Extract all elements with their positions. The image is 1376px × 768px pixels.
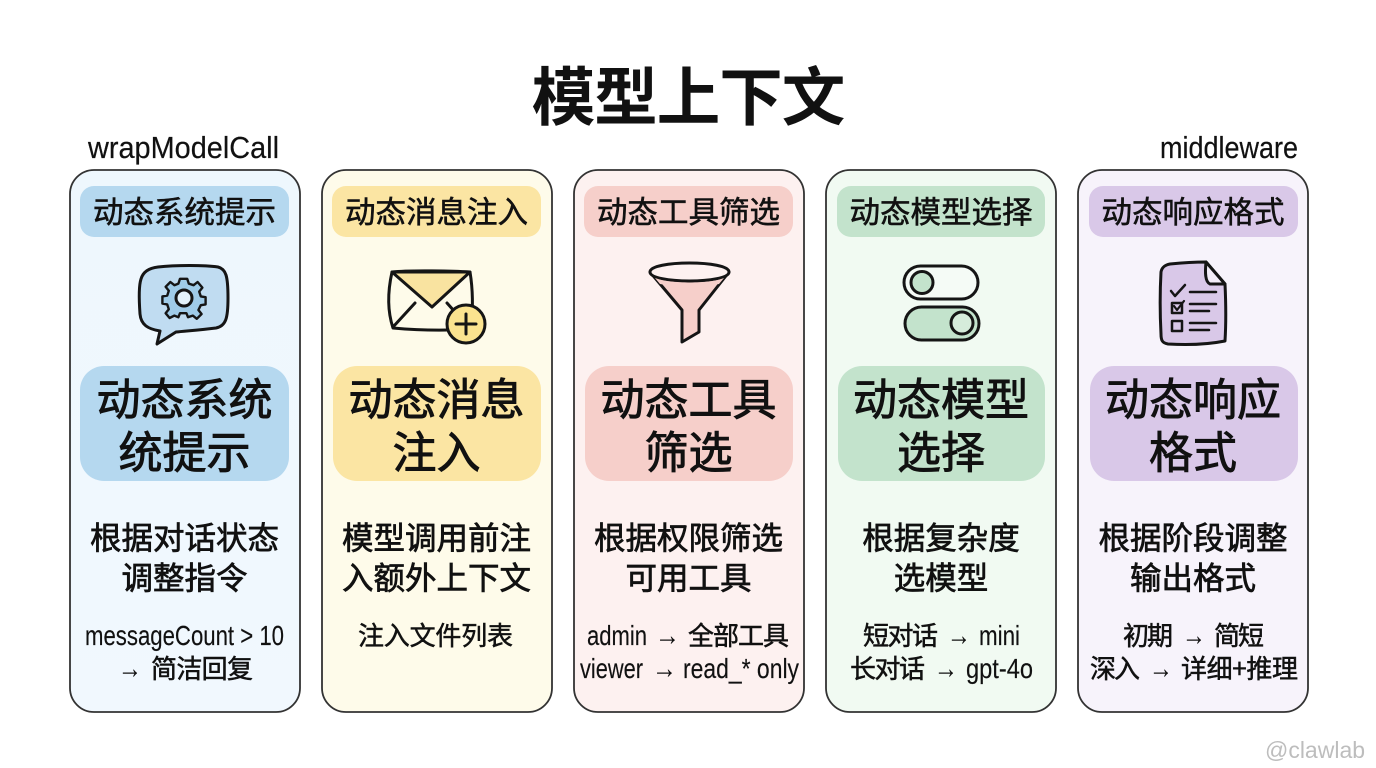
example: read_* only: [683, 653, 799, 684]
large heading: 格式: [1149, 417, 1237, 481]
large heading: [585, 364, 793, 481]
large heading: 筛选: [644, 417, 732, 481]
description: [90, 513, 279, 599]
example: [1090, 616, 1298, 686]
panel: dynamic response format: [1078, 170, 1308, 712]
example: 简短: [1214, 616, 1264, 653]
description: 根据复杂度: [862, 513, 1020, 559]
description: 输出格式: [1130, 553, 1256, 599]
large heading: [1090, 364, 1298, 481]
panel heading: 动态工具筛选: [597, 188, 780, 232]
large heading: 统提示: [118, 417, 250, 481]
example: →: [1182, 619, 1206, 652]
example: 长对话: [850, 649, 925, 686]
large heading: [333, 364, 541, 481]
description: 根据阶段调整: [1098, 513, 1288, 559]
description: 模型调用前注: [342, 513, 531, 559]
example: viewer: [580, 653, 643, 684]
example: [85, 620, 284, 686]
large heading: 动态消息: [348, 364, 524, 428]
example: 简洁回复: [151, 649, 253, 686]
description: 根据权限筛选: [594, 513, 783, 559]
label: wrapModelCall: wrapModelCall: [87, 130, 279, 165]
description: [594, 513, 783, 599]
description: [1098, 513, 1288, 599]
description: [862, 513, 1020, 599]
icon: envelope with plus: [389, 271, 485, 343]
description: [342, 513, 531, 599]
description: 入额外上下文: [342, 553, 531, 599]
icon: toggle switches: [904, 266, 979, 340]
example: →: [934, 652, 958, 685]
example: 全部工具: [688, 616, 789, 653]
example: [580, 616, 799, 685]
example: →: [1149, 652, 1173, 685]
panel heading: 动态模型选择: [850, 188, 1032, 232]
label: middleware: middleware: [1160, 130, 1298, 165]
large heading: [838, 364, 1045, 481]
large heading: [80, 364, 289, 481]
example: 深入: [1090, 649, 1140, 686]
panel: dynamic message injection: [322, 170, 552, 712]
panel heading: 动态系统提示: [93, 188, 276, 232]
example: gpt-4o: [966, 653, 1033, 684]
example: →: [652, 652, 677, 685]
icon: checklist document: [1160, 262, 1226, 345]
icon: funnel: [650, 263, 729, 342]
large heading: 注入: [392, 417, 480, 481]
example: →: [118, 652, 142, 685]
example: 短对话: [863, 616, 938, 653]
example: →: [947, 619, 971, 652]
example: mini: [979, 620, 1020, 651]
large heading: 动态系统: [96, 364, 272, 428]
example: messageCount > 10: [85, 620, 284, 651]
example: 详细+推理: [1181, 649, 1298, 686]
description: 调整指令: [121, 553, 248, 599]
description: 选模型: [894, 553, 988, 599]
panel heading: 动态消息注入: [345, 188, 528, 232]
panel heading: 动态响应格式: [1102, 188, 1284, 232]
description: 可用工具: [625, 553, 752, 599]
panel: dynamic model selection: [826, 170, 1056, 712]
example: 初期: [1123, 616, 1173, 653]
example: 注入文件列表: [358, 616, 513, 653]
large heading: 动态工具: [600, 364, 776, 428]
title: 模型上下文: [532, 47, 845, 139]
large heading: 动态响应: [1105, 364, 1281, 428]
panel: dynamic tool filtering: [574, 170, 804, 712]
example: →: [655, 619, 680, 652]
example: [850, 616, 1033, 686]
large heading: 动态模型: [853, 364, 1029, 428]
watermark: @clawlab: [1265, 737, 1365, 763]
example: admin: [587, 620, 647, 651]
large heading: 选择: [897, 417, 985, 481]
icon: speech bubble with gear: [139, 266, 228, 344]
description: 根据对话状态: [90, 513, 279, 559]
panel: dynamic system prompt: [70, 170, 300, 712]
